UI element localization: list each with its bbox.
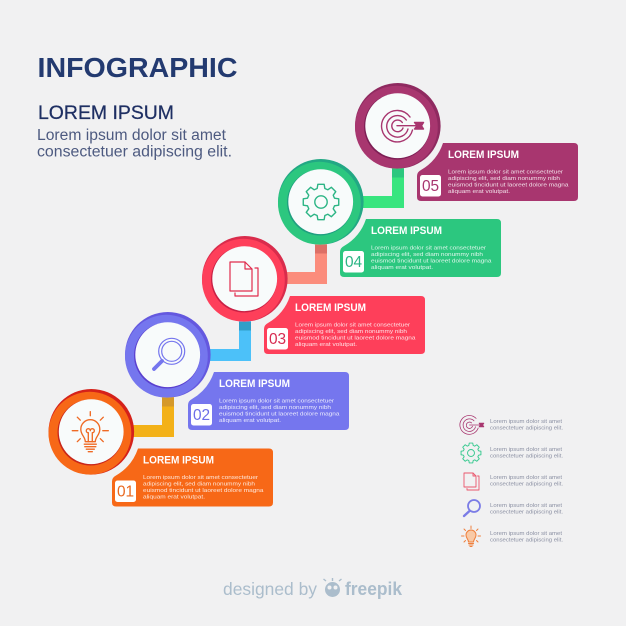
card 1 text xyxy=(143,475,264,500)
circle badge 5 xyxy=(355,83,441,169)
number box 03 xyxy=(267,328,288,350)
legend text 3: consectetuer adipiscing elit. xyxy=(490,482,563,488)
card 3 text: Lorem ipsum dolor sit amet consectetuer xyxy=(295,322,410,328)
footer credit xyxy=(223,578,403,599)
card 5 title: LOREM IPSUM xyxy=(448,149,519,161)
legend text 4: consectetuer adipiscing elit. xyxy=(490,510,563,516)
step 2: blue magnifier xyxy=(125,312,349,430)
card 3 text: euismod tincidunt ut laoreet dolore magna xyxy=(295,335,416,341)
step 4: green gear xyxy=(278,159,501,277)
circle badge 2 xyxy=(125,312,211,398)
number 04: 04 xyxy=(345,254,362,271)
legend text 1: consectetuer adipiscing elit. xyxy=(490,426,563,432)
legend icon: documents xyxy=(464,473,479,490)
card 1 text: Lorem ipsum dolor sit amet consectetuer xyxy=(143,475,258,481)
circle badge 1 xyxy=(48,389,134,475)
legend text 1 xyxy=(490,419,563,432)
legend icon: magnifier xyxy=(464,500,480,516)
card 2 text: aliquam erat volutpat. xyxy=(219,418,281,424)
legend xyxy=(460,415,563,546)
legend text 2 xyxy=(490,447,563,460)
number box 04 xyxy=(343,251,364,272)
icon: documents xyxy=(230,262,258,296)
card 4 text: aliquam erat volutpat. xyxy=(371,265,433,271)
number 03: 03 xyxy=(269,331,286,348)
card 1 text: euismod tincidunt ut laoreet dolore magna xyxy=(143,488,264,494)
card 1 xyxy=(112,448,273,506)
step 5: purple target xyxy=(355,83,578,201)
icon: target xyxy=(382,110,424,142)
connector: step 2 to 1 xyxy=(125,394,174,437)
number box 02 xyxy=(191,404,212,426)
card 1 text: aliquam erat volutpat. xyxy=(143,494,205,500)
legend text 5: Lorem ipsum dolor sit amet xyxy=(490,531,563,537)
connector: step 3 to 2 xyxy=(202,318,251,361)
legend text 5 xyxy=(490,531,563,544)
connector: step 4 to 3 xyxy=(278,241,327,284)
number 02: 02 xyxy=(193,407,210,424)
card 5 text: euismod tincidunt ut laoreet dolore magna xyxy=(448,182,569,188)
intro text xyxy=(37,127,232,160)
intro text: consectetuer adipiscing elit. xyxy=(37,144,232,160)
legend text 2: consectetuer adipiscing elit. xyxy=(490,454,563,460)
legend text 3: Lorem ipsum dolor sit amet xyxy=(490,475,563,481)
number 01: 01 xyxy=(117,484,134,501)
legend text 4 xyxy=(490,503,563,516)
circle badge 4 xyxy=(278,159,364,245)
card 5 text: aliquam erat volutpat. xyxy=(448,189,510,195)
card 5 text xyxy=(448,169,569,195)
card 4 text: adipiscing elit, sed diam nonummy nibh xyxy=(371,252,483,258)
card 5 xyxy=(417,143,578,201)
card 2 text: euismod tincidunt ut laoreet dolore magna xyxy=(219,411,340,417)
step 1: orange bulb xyxy=(48,389,273,506)
card 4 text: euismod tincidunt ut laoreet dolore magna xyxy=(371,258,492,264)
step 3: red documents xyxy=(202,236,425,354)
card 1 title: LOREM IPSUM xyxy=(143,454,214,466)
legend icon: gear xyxy=(461,443,481,463)
freepik: freepik xyxy=(345,579,403,599)
intro text: Lorem ipsum dolor sit amet xyxy=(37,127,227,144)
card 3 text: aliquam erat volutpat. xyxy=(295,342,357,348)
designed by: designed by xyxy=(223,579,317,599)
card 2 title: LOREM IPSUM xyxy=(219,378,290,390)
card 4 xyxy=(340,219,501,277)
legend icon: bulb xyxy=(462,526,480,546)
circle badge 3 xyxy=(202,236,288,322)
card 2 xyxy=(188,372,349,430)
card 5 text: Lorem ipsum dolor sit amet consectetuer xyxy=(448,169,563,175)
legend icon: target xyxy=(460,415,484,434)
title: INFOGRAPHIC xyxy=(38,52,238,83)
icon: magnifier xyxy=(154,338,185,369)
legend text 2: Lorem ipsum dolor sit amet xyxy=(490,447,563,453)
connector: step 5 to 4 xyxy=(355,165,404,208)
number box 01 xyxy=(115,480,136,502)
card 2 text: adipiscing elit, sed diam nonummy nibh xyxy=(219,405,331,411)
card 2 text xyxy=(219,398,340,424)
icon: gear xyxy=(303,184,339,220)
card 3 title: LOREM IPSUM xyxy=(295,302,366,314)
card 5 text: adipiscing elit, sed diam nonummy nibh xyxy=(448,176,560,182)
number box 05 xyxy=(420,175,441,196)
card 3 text xyxy=(295,322,416,348)
card 2 text: Lorem ipsum dolor sit amet consectetuer xyxy=(219,398,334,404)
card 3 text: adipiscing elit, sed diam nonummy nibh xyxy=(295,329,407,335)
legend text 5: consectetuer adipiscing elit. xyxy=(490,538,563,544)
legend text 3 xyxy=(490,475,563,488)
card 4 text: Lorem ipsum dolor sit amet consectetuer xyxy=(371,245,486,251)
card 1 text: adipiscing elit, sed diam nonummy nibh xyxy=(143,481,255,487)
legend text 4: Lorem ipsum dolor sit amet xyxy=(490,503,563,509)
card 4 title: LOREM IPSUM xyxy=(371,225,442,237)
icon: freepik mascot xyxy=(324,578,342,597)
icon: light bulb xyxy=(72,412,108,452)
subtitle: LOREM IPSUM xyxy=(38,102,174,124)
card 4 text xyxy=(371,245,492,271)
number 05: 05 xyxy=(422,178,439,195)
card 3 xyxy=(264,296,425,354)
legend text 1: Lorem ipsum dolor sit amet xyxy=(490,419,563,425)
